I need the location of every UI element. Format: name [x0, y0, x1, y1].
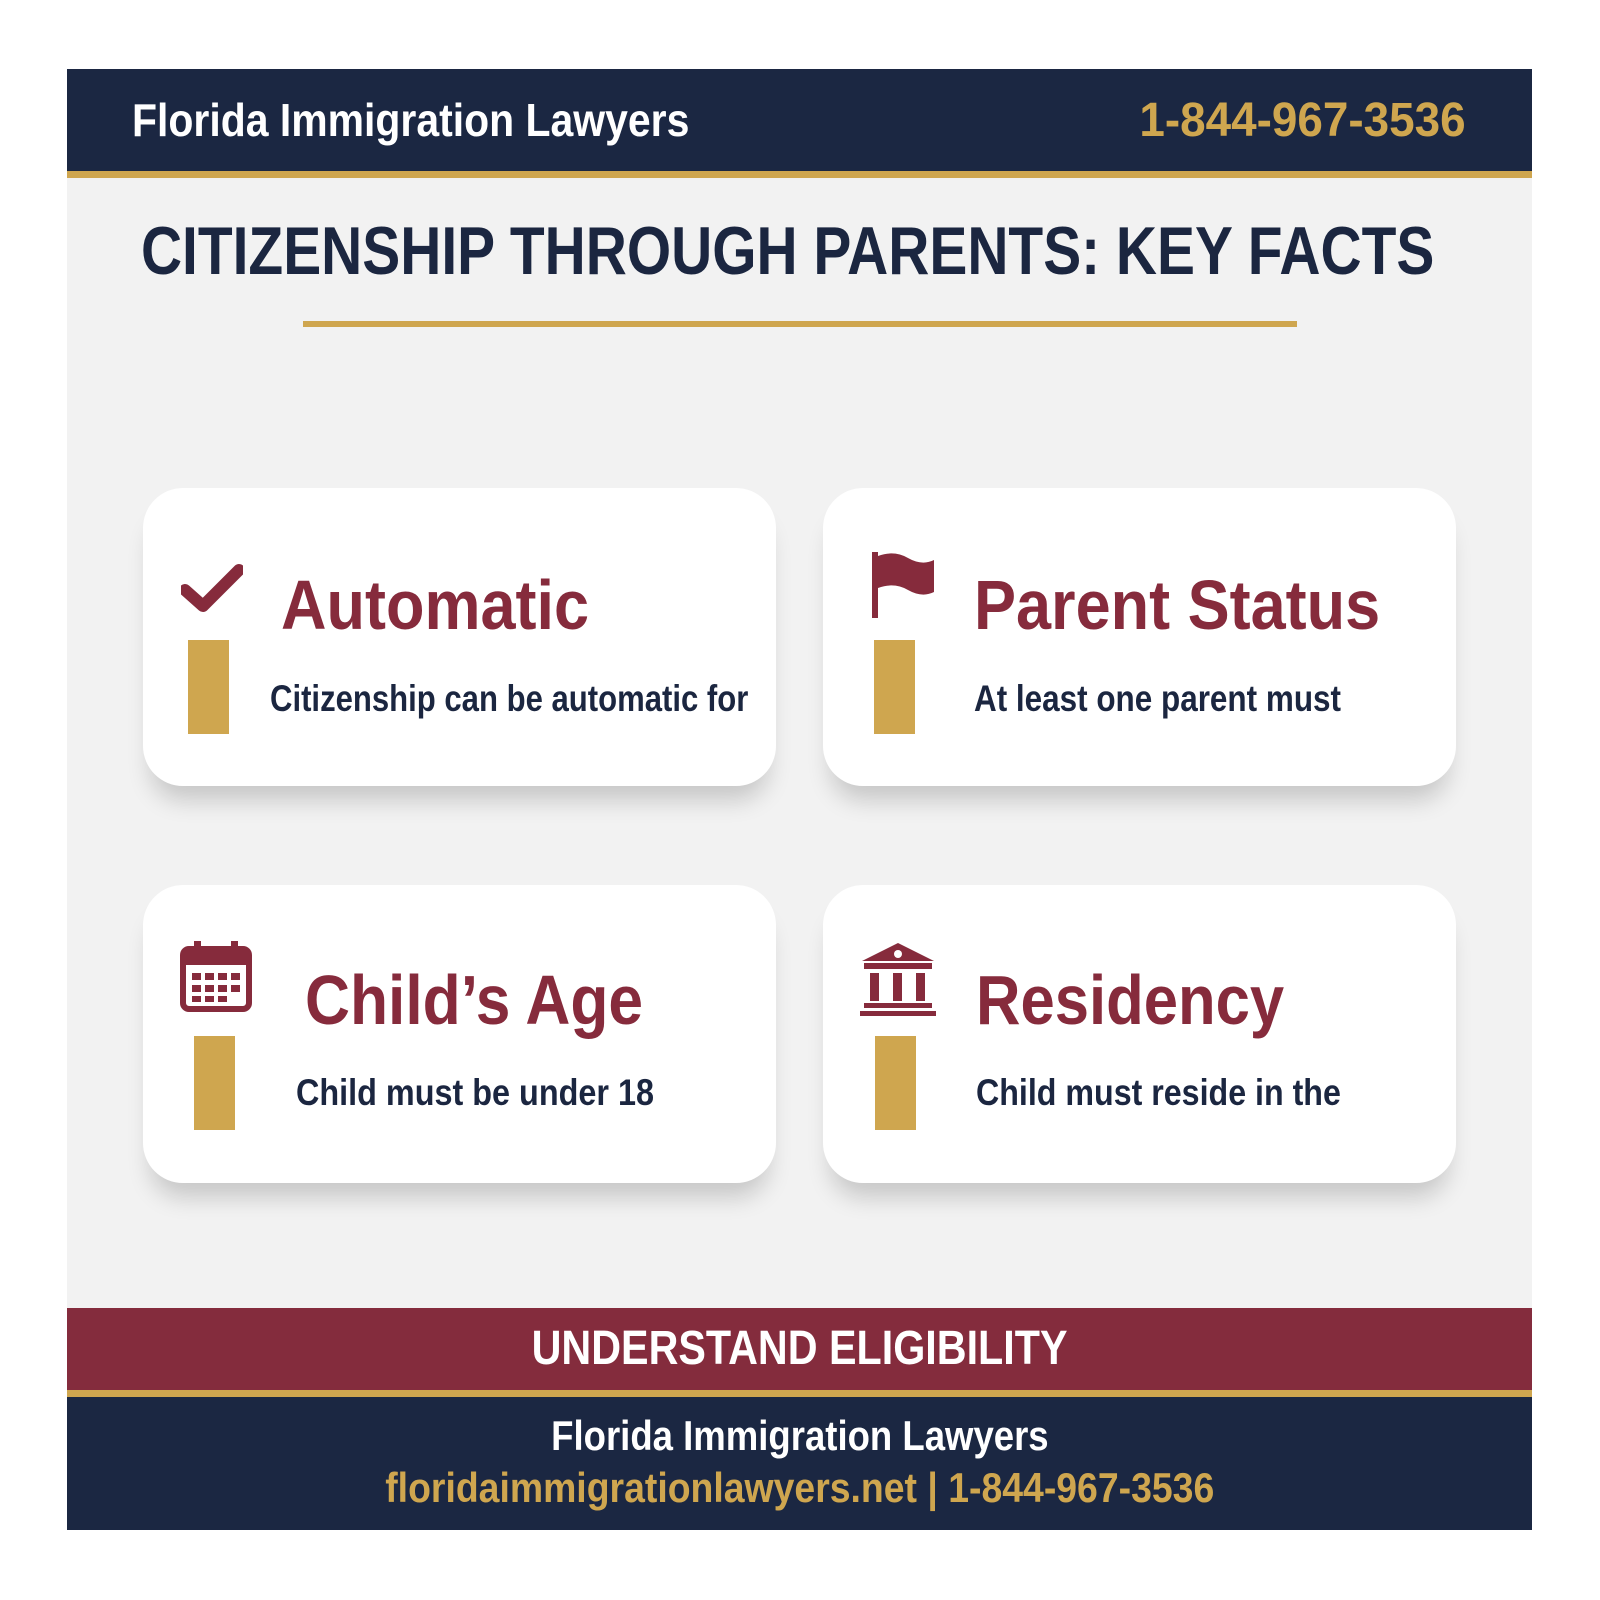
footer contact: floridaimmigrationlawyers.net | 1-844-967-3536: [385, 1464, 1214, 1511]
card: Child's Age: [143, 885, 776, 1183]
heading: Automatic: [281, 566, 589, 644]
text: Citizenship can be automatic for: [270, 678, 748, 719]
card: Parent Status: [823, 488, 1456, 786]
icon: checkmark: [181, 564, 243, 612]
text: Child must reside in the: [976, 1072, 1341, 1113]
heading: Residency: [976, 961, 1284, 1039]
icon: flag: [872, 552, 934, 618]
icon: calendar: [180, 941, 252, 1012]
footer: [67, 1397, 1532, 1530]
banner: understand eligibility: [67, 1308, 1532, 1390]
title: CITIZENSHIP THROUGH PARENTS: KEY FACTS: [141, 213, 1435, 289]
heading: Parent Status: [974, 566, 1380, 644]
text: Child must be under 18: [296, 1072, 654, 1113]
footer firm name: Florida Immigration Lawyers: [551, 1412, 1048, 1459]
header bar: [67, 69, 1532, 171]
banner: understand eligibility: UNDERSTAND ELIGIBILITY: [532, 1322, 1067, 1375]
header phone: 1-844-967-3536: [1140, 94, 1466, 147]
heading: Child’s Age: [305, 961, 643, 1039]
header firm name: Florida Immigration Lawyers: [132, 94, 689, 146]
text: At least one parent must: [974, 678, 1341, 719]
card: Automatic: [143, 488, 776, 786]
icon: government building: [860, 943, 936, 1016]
card: Residency: [823, 885, 1456, 1183]
